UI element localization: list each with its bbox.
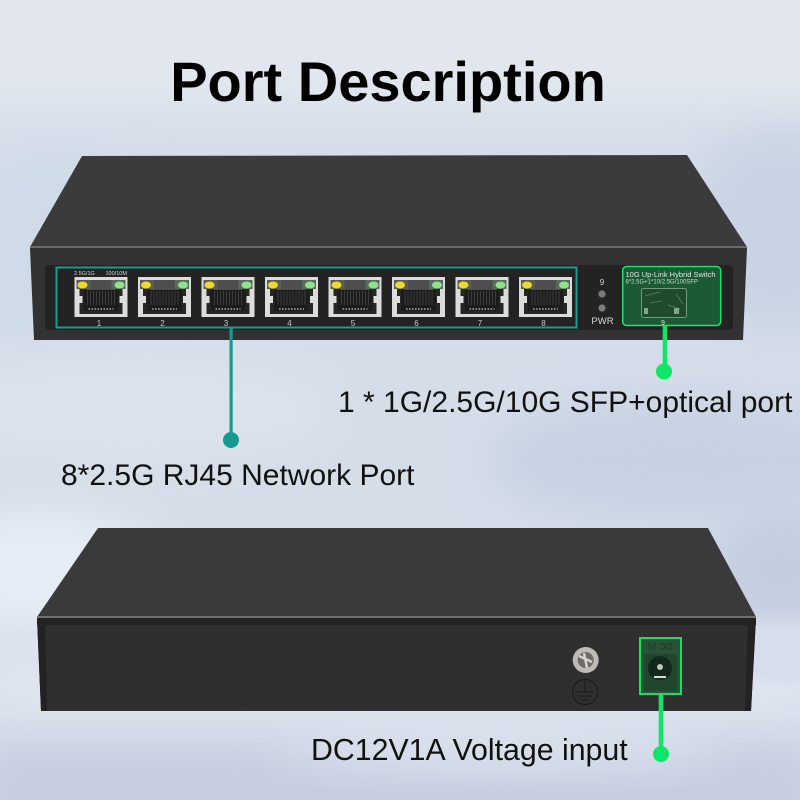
top surface of switch [30, 155, 747, 247]
status LEDs [591, 278, 614, 327]
connector: SFP callout line [656, 325, 672, 380]
DC power jack: DC IN [648, 641, 672, 651]
rear top edge highlight [37, 616, 756, 618]
port 4 [265, 277, 318, 328]
SFP+ green panel: 8*2.5G+1*10/2.5G/100SFP [626, 280, 698, 286]
port 5: 5 [351, 319, 356, 328]
status LEDs: 9 [600, 278, 605, 287]
title: Port Description [170, 50, 606, 113]
connector: RJ45 callout line [223, 328, 239, 448]
port 1 [74, 277, 128, 328]
rear face [37, 618, 756, 711]
top surface rear [37, 528, 756, 617]
front top edge highlight [30, 246, 747, 248]
speed label right: 100/10M [106, 271, 127, 277]
port 8 [519, 277, 572, 328]
port 1: 1 [97, 319, 102, 328]
label: DC: DC12V1A Voltage input [311, 734, 628, 767]
SFP+ green panel [623, 266, 721, 327]
SFP+ green panel: 10G Up-Link Hybrid Switch [626, 270, 716, 279]
port 5 [328, 277, 382, 328]
port 7: 7 [478, 319, 483, 328]
speed label left: 2.5G/1G [74, 271, 95, 277]
RJ45 port group [56, 268, 576, 328]
connector: DC callout line [653, 695, 669, 762]
right side shadow [745, 618, 756, 711]
port recess panel [45, 265, 733, 330]
teal highlight frame [56, 268, 576, 328]
DC power jack [640, 638, 681, 694]
port 4: 4 [287, 319, 292, 328]
label: SFP: 1 * 1G/2.5G/10G SFP+optical port [338, 386, 793, 419]
port 6 [392, 277, 445, 328]
port 3: 3 [224, 319, 229, 328]
ground symbol [572, 680, 598, 704]
switch front view [30, 155, 747, 340]
port 8: 8 [541, 319, 546, 328]
SFP cage [642, 288, 686, 318]
port 2: 2 [160, 319, 165, 328]
status LEDs: PWR [591, 316, 614, 327]
port 2 [138, 277, 191, 328]
front face of switch [30, 248, 747, 340]
SFP+ green panel: 9 [661, 320, 665, 327]
left side shadow [37, 618, 47, 711]
port 3 [202, 277, 254, 328]
port 6: 6 [414, 319, 419, 328]
label: RJ45: 8*2.5G RJ45 Network Port [61, 459, 415, 492]
port 7 [456, 277, 508, 328]
rear upper shadow band [37, 618, 756, 625]
switch rear view [37, 528, 756, 711]
ground screw [573, 647, 599, 673]
